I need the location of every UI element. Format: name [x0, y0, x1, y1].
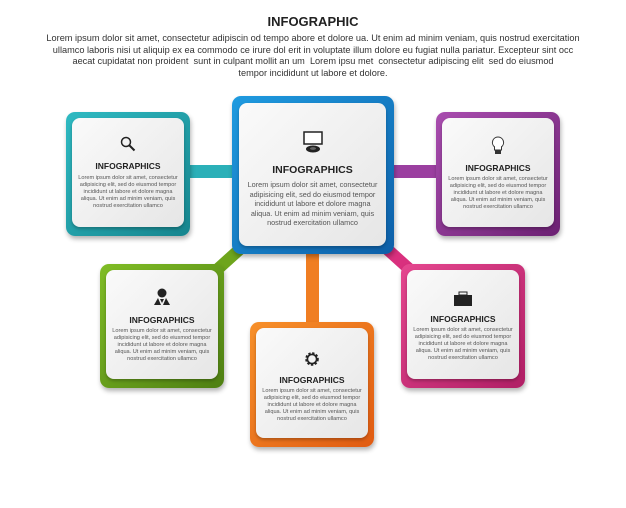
panel: purple: [436, 112, 560, 236]
panel: green: INFOGRAPHICS: [129, 315, 195, 325]
icon: magnifier: [120, 136, 136, 152]
panel: blue center: [232, 96, 394, 254]
icon: person: [154, 288, 170, 305]
panel: teal: Lorem ipsum dolor sit amet, consectetur adipisicing elit, sed do eiusmod tempor incididunt ut labore et dolore magna aliqua. Ut enim ad minim veniam, quis nostrud exercitation ullamco: [78, 175, 178, 209]
panel: pink: [401, 264, 525, 388]
icon: bulb: [492, 136, 504, 154]
intro text: aecat cupidatat non proident sunt in culpant mollit an um Lorem ipsu met consectetur adipiscing elit sed do eiusmod: [72, 56, 554, 66]
panel: blue center: Lorem ipsum dolor sit amet, consectetur adipisicing elit, sed do eiusmod tempor incididunt ut labore et dolore magna aliqua. Ut enim ad minim veniam, quis nostrud exercitation ullamco: [248, 180, 377, 227]
intro text: [46, 33, 580, 78]
connector teal: [188, 165, 234, 178]
connector green: [213, 241, 247, 275]
panel: green: [100, 264, 224, 388]
title: INFOGRAPHIC: [268, 14, 358, 29]
panel: green: Lorem ipsum dolor sit amet, consectetur adipisicing elit, sed do eiusmod tempor incididunt ut labore et dolore magna aliqua. Ut enim ad minim veniam, quis nostrud exercitation ullamco: [112, 328, 212, 362]
intro text: Lorem ipsum dolor sit amet, consectetur adipiscin od tempo abore et dolore ua. Ut enim ad minim veniam, quis nostrud exercitation: [46, 33, 580, 43]
panel: blue center: INFOGRAPHICS: [272, 164, 353, 176]
panel: orange: [250, 322, 374, 447]
panel: teal: [66, 112, 190, 236]
connector pink: [380, 242, 414, 274]
panel: purple: Lorem ipsum dolor sit amet, consectetur adipisicing elit, sed do eiusmod tempor incididunt ut labore et dolore magna aliqua. Ut enim ad minim veniam, quis nostrud exercitation ullamco: [448, 176, 548, 210]
icon: monitor: [303, 131, 323, 152]
panel: orange: INFOGRAPHICS: [279, 375, 345, 385]
panel: pink: INFOGRAPHICS: [430, 314, 496, 324]
intro text: tempor incididunt ut labore et dolore.: [238, 68, 388, 78]
panel: orange: Lorem ipsum dolor sit amet, consectetur adipisicing elit, sed do eiusmod tempor incididunt ut labore et dolore magna aliqua. Ut enim ad minim veniam, quis nostrud exercitation ullamco: [262, 388, 362, 422]
panel: purple: INFOGRAPHICS: [465, 163, 531, 173]
connector purple: [392, 165, 438, 178]
intro text: ullamco laboris nisi ut aliquip ex ea commodo ce irure dol erit in voluptate illum dolore eu fugiat nulla pariatur. Excepteur sint occ: [53, 45, 573, 55]
connector orange: [306, 250, 319, 324]
panel: teal: INFOGRAPHICS: [95, 161, 161, 171]
icon: briefcase: [454, 292, 472, 306]
panel: pink: Lorem ipsum dolor sit amet, consectetur adipisicing elit, sed do eiusmod tempor incididunt ut labore et dolore magna aliqua. Ut enim ad minim veniam, quis nostrud exercitation ullamco: [413, 327, 513, 361]
icon: gear: [305, 352, 319, 366]
